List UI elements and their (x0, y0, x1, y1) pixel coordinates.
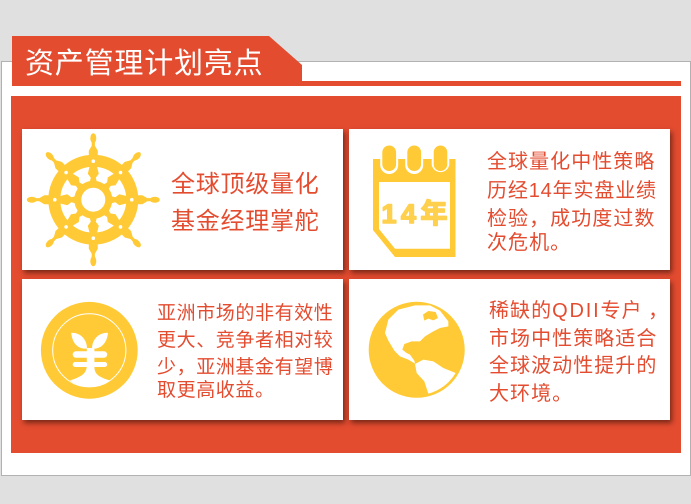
panel: helm fund managers: 全球顶级量化 (171, 171, 320, 198)
panel: helm fund managers (22, 129, 343, 270)
panel: scarce QDII product (349, 279, 670, 420)
icon: yen coin (40, 302, 138, 399)
panel: scarce QDII product: 市场中性策略适合 (489, 328, 657, 350)
text (487, 150, 657, 254)
icon: globe (368, 302, 465, 398)
text (489, 294, 669, 405)
panel: scarce QDII product: 全球波动性提升的 (489, 355, 657, 377)
icon: calendar 14 years: 14年 (382, 199, 448, 229)
panel: Asian market inefficiency: 更大、竞争者相对较 (157, 330, 333, 351)
red main panel (11, 96, 681, 453)
icon: ship wheel (26, 133, 160, 266)
text (171, 171, 320, 235)
panel: Asian market inefficiency: 亚洲市场的非有效性 (157, 303, 333, 324)
panel: 14-year track record: 次危机。 (487, 232, 571, 254)
panel: helm fund managers: 基金经理掌舵 (171, 208, 320, 235)
panel: 14-year track record: 检验，成功度过数 (487, 202, 655, 231)
panel: 14-year track record: 历经14年实盘业绩 (487, 180, 657, 202)
panel: 14-year track record (349, 129, 670, 270)
panel: scarce QDII product: 稀缺的QDII专户 ， (489, 294, 669, 323)
panel: Asian market inefficiency (22, 279, 343, 420)
icon: calendar 14 years (373, 146, 456, 257)
panel: Asian market inefficiency: 取更高收益。 (157, 380, 275, 401)
panel: Asian market inefficiency: 少，亚洲基金有望博 (157, 352, 333, 379)
text (157, 302, 333, 401)
title banner (12, 36, 681, 86)
panel: 14-year track record: 全球量化中性策略 (487, 151, 655, 173)
title text: 资产管理计划亮点 (25, 48, 263, 80)
panel: scarce QDII product: 大环境。 (489, 383, 573, 405)
